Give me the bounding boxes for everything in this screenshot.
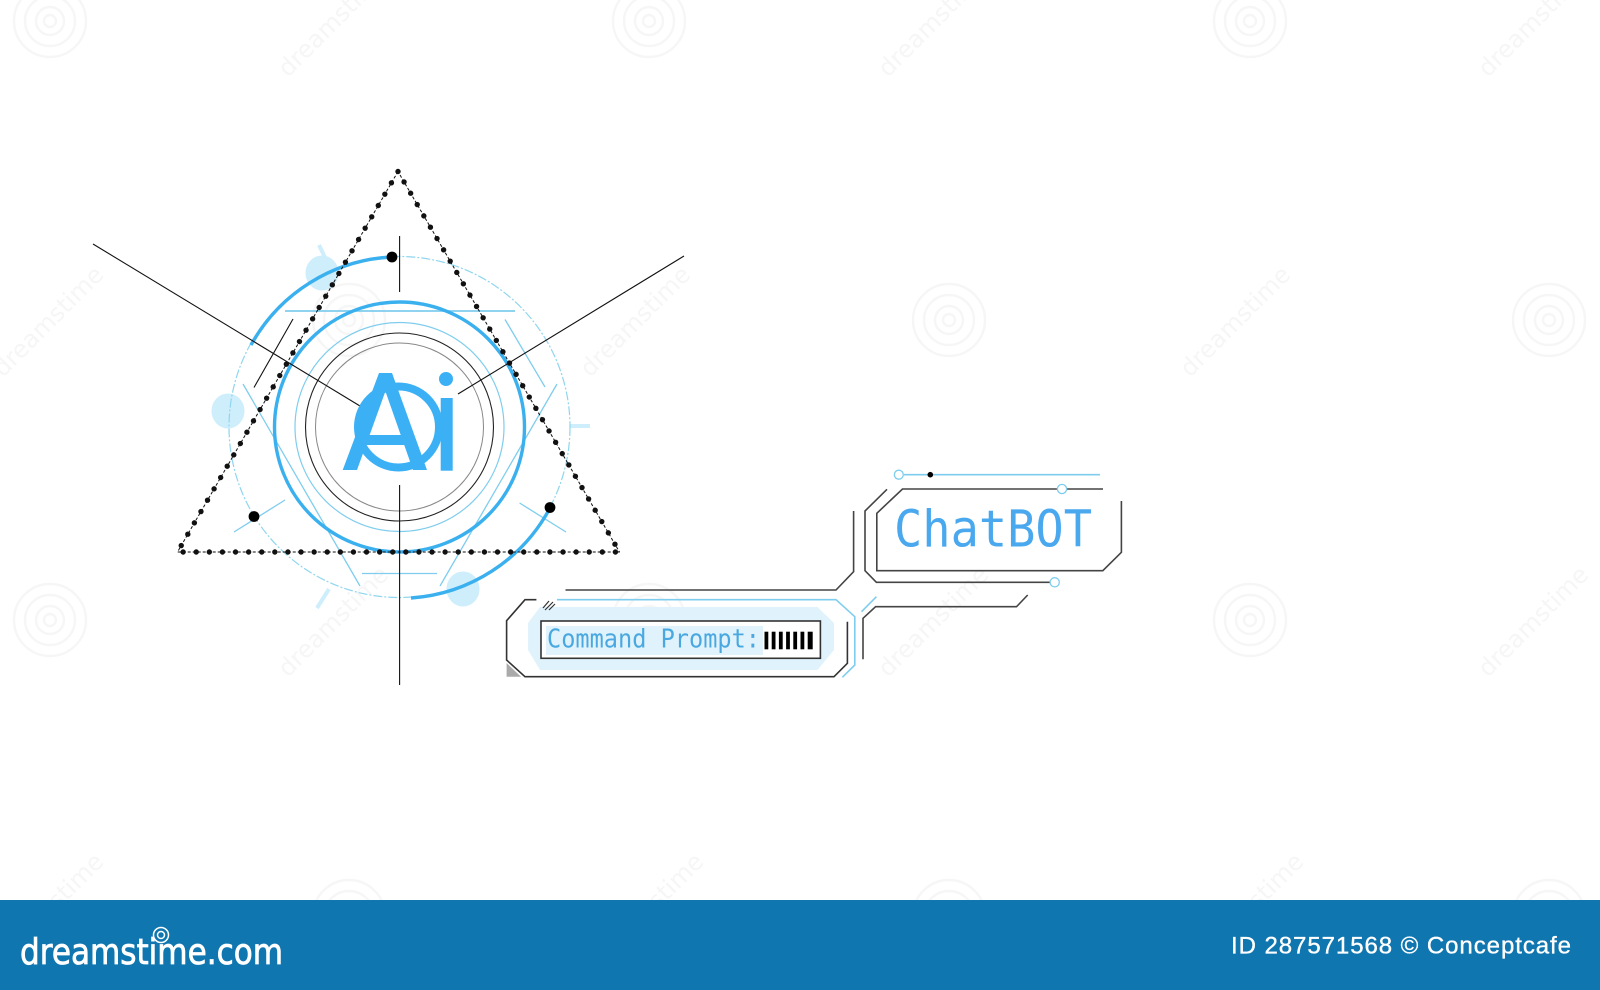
AI emblem <box>93 172 684 685</box>
prompt highlight <box>546 626 763 655</box>
watermark layer: dreamstime <box>1174 261 1296 382</box>
prompt field <box>541 621 820 658</box>
dashed outer circle <box>229 256 570 598</box>
connector lines <box>566 511 1028 659</box>
dotted triangle <box>178 172 620 552</box>
footer band <box>0 900 1600 990</box>
black nodes <box>249 252 555 522</box>
outer bracket <box>865 489 1050 582</box>
top blue rail <box>894 470 1100 479</box>
progress bars <box>764 632 813 649</box>
frame nodes <box>1050 484 1067 587</box>
decorative light blue blobs <box>212 245 590 608</box>
watermark layer: dreamstime <box>272 561 394 682</box>
black pointer lines <box>93 236 684 685</box>
prompt text: Command Prompt: <box>547 624 760 654</box>
grey corner <box>507 663 521 677</box>
thin blue lines <box>234 311 566 586</box>
black outer frame <box>507 600 847 677</box>
thick blue arcs <box>251 257 550 598</box>
concentric rings <box>274 302 524 552</box>
watermark layer: dreamstime <box>1472 561 1594 682</box>
hatch mark <box>543 601 555 610</box>
blue outer frame <box>557 600 855 677</box>
ChatBOT panel <box>865 470 1121 587</box>
watermark layer: dreamstime <box>872 561 994 682</box>
light blue backing <box>528 607 834 670</box>
logo: Ai <box>343 372 453 471</box>
inner frame <box>877 489 1121 571</box>
watermark layer: dreamstime <box>1187 848 1309 969</box>
image credit: ID 287571568 © Conceptcafe <box>1231 932 1571 960</box>
watermark layer: dreamstime <box>587 848 709 969</box>
watermark layer: dreamstime <box>574 261 696 382</box>
Command Prompt panel <box>507 600 855 677</box>
ChatBOT label: ChatBOT <box>894 500 1092 560</box>
dreamstime logo: dreamstime.com <box>20 932 283 973</box>
